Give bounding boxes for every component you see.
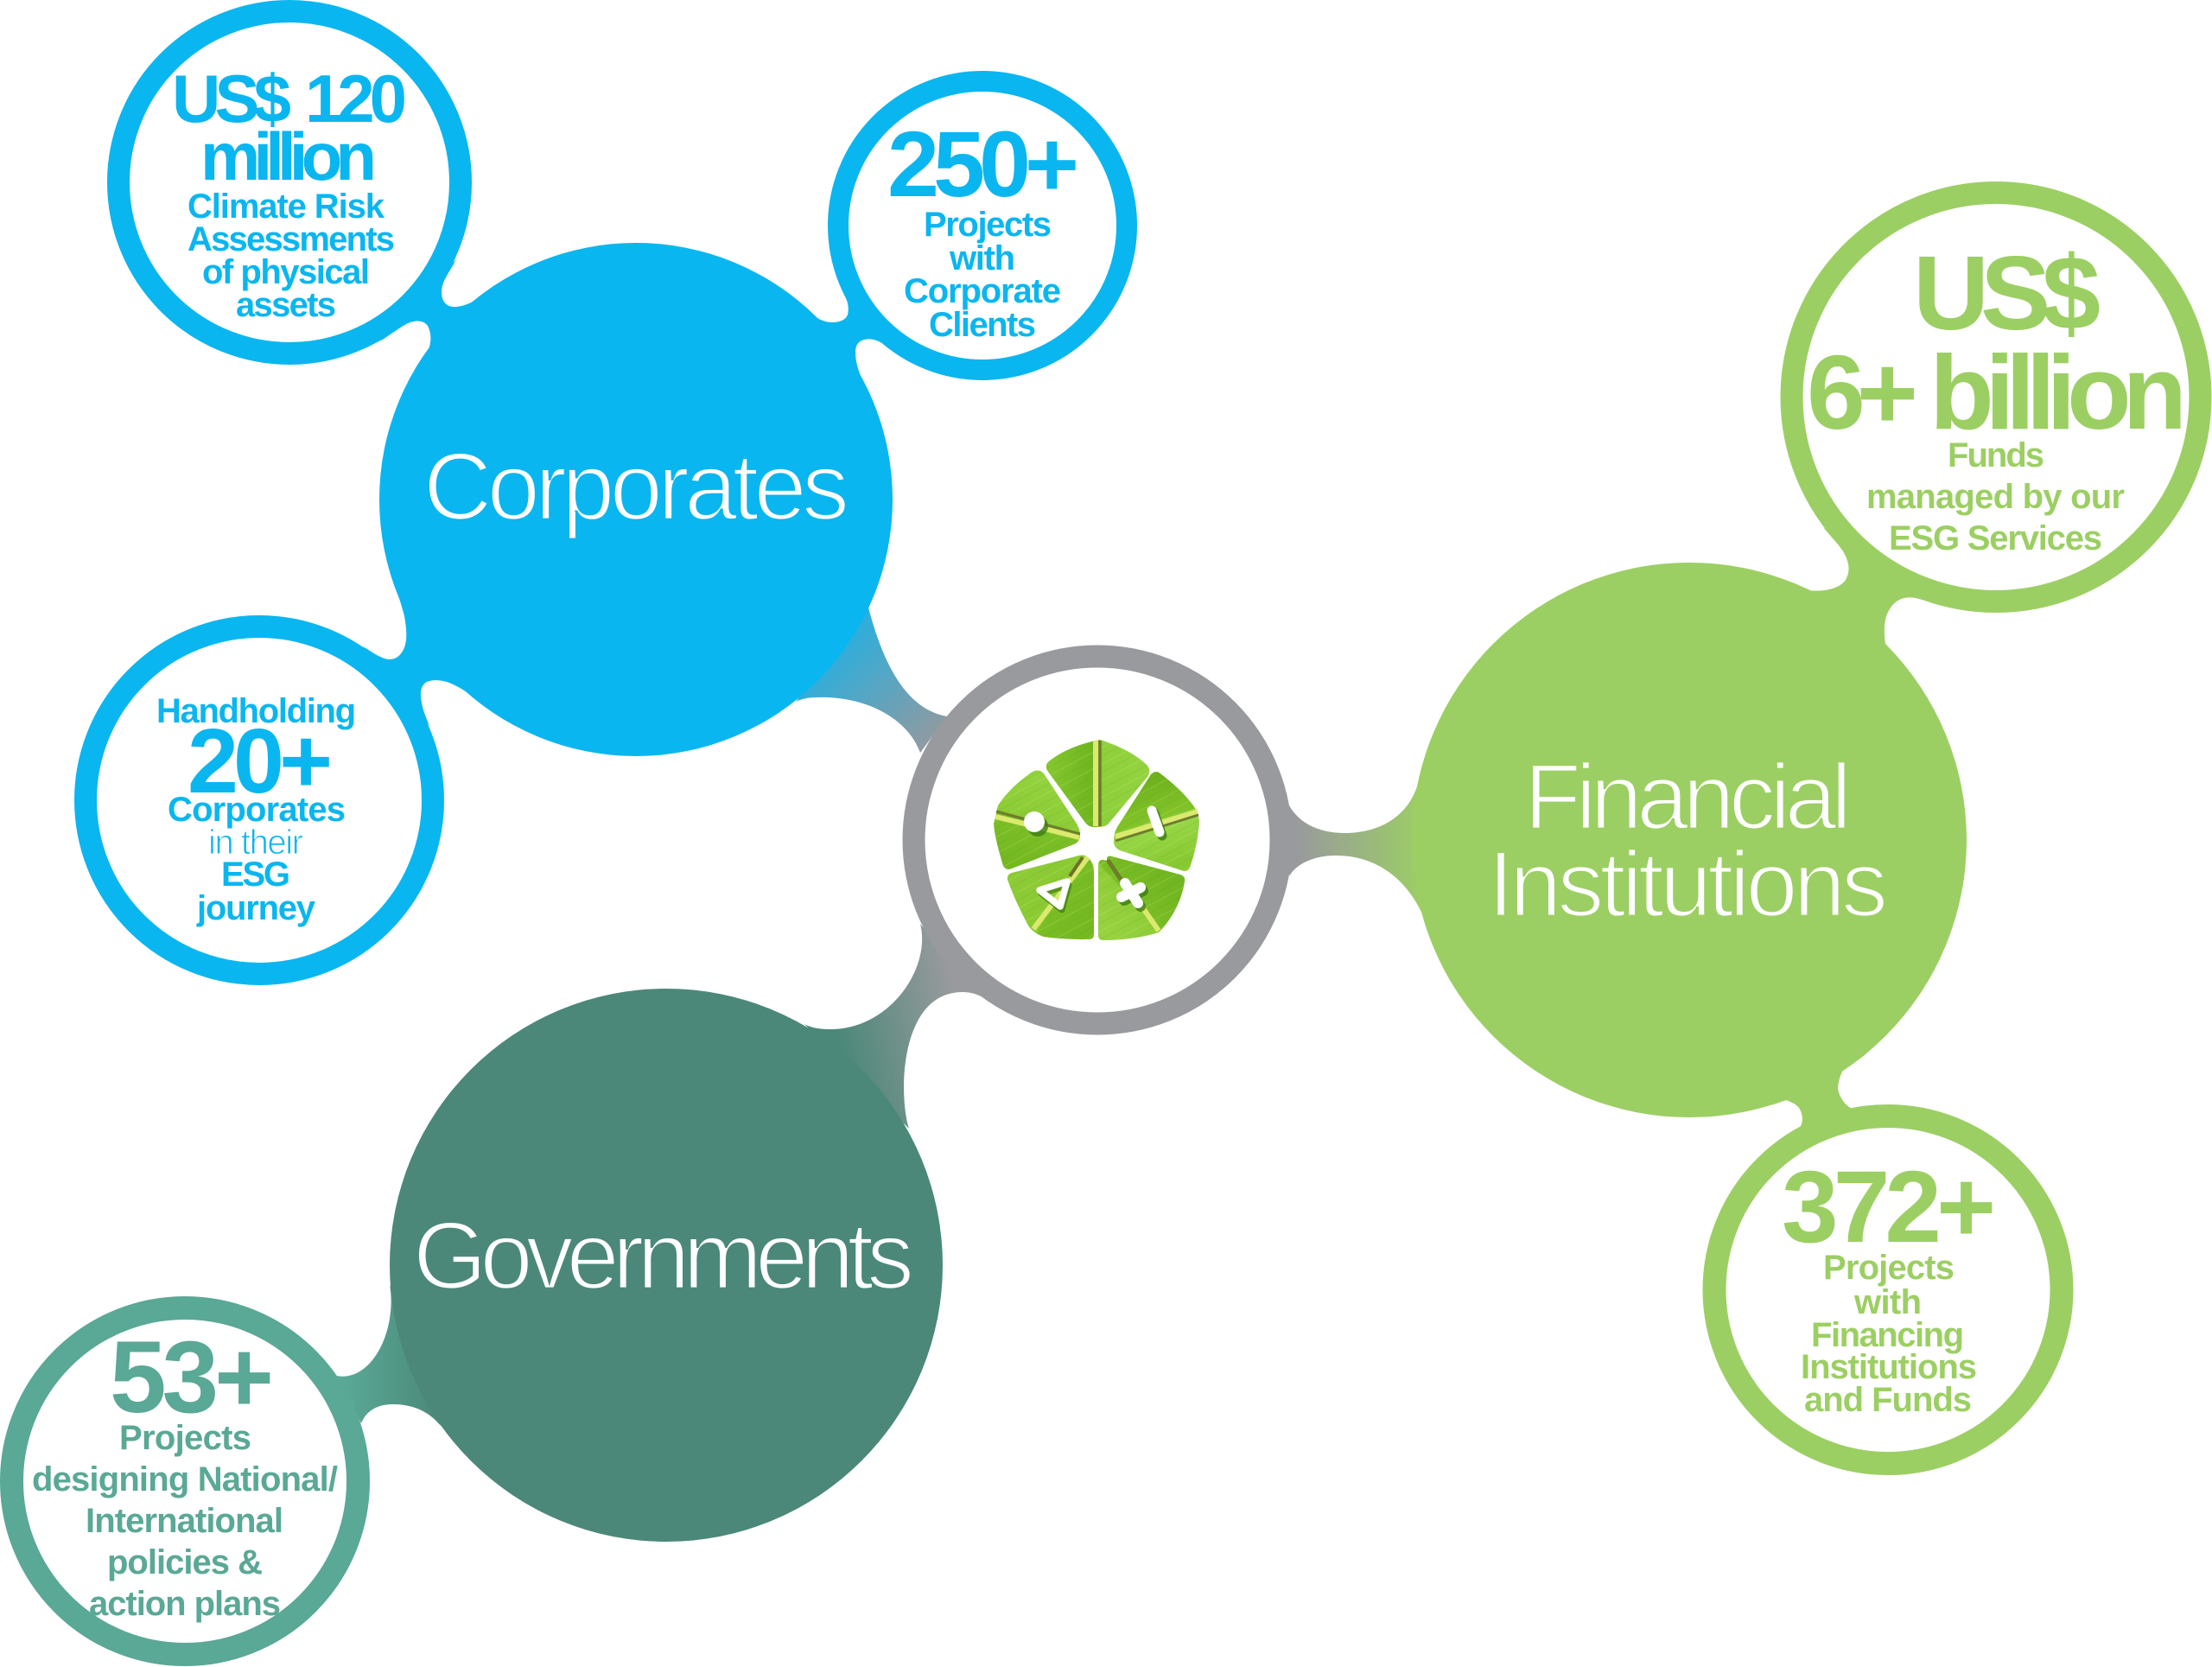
panel: Corporates hub (379, 243, 893, 756)
petal: top (1046, 740, 1149, 827)
panel: Handholding 20+ bubble: in their (208, 824, 303, 862)
icon: leaf logo (994, 740, 1199, 940)
panel: Financial Institutions hub: Financial (1524, 744, 1852, 849)
panel: 372+ bubble: 372+ (1782, 1150, 1996, 1264)
connector: center to Financial Institutions (1289, 784, 1427, 926)
center ring (914, 657, 1281, 1023)
panel: US$ 120 million bubble (118, 11, 461, 353)
panel: Financial Institutions hub (1412, 563, 1967, 1117)
connector: Financial Institutions to US$ 6+ billion bubble (1797, 527, 1936, 657)
panel: 372+ bubble: Financing (1811, 1316, 1964, 1354)
panel: 53+ bubble: designing National/ (32, 1460, 338, 1498)
connector: Corporates to center (796, 608, 947, 753)
panel: US$ 6+ billion bubble (1792, 193, 2200, 601)
petal: lower left with triangle (1007, 856, 1094, 939)
panel: US$ 120 million bubble: Assessments (188, 220, 395, 258)
connector: Financial Institutions to 372+ bubble (1771, 1054, 1875, 1141)
panel: US$ 120 million bubble: 120 (305, 60, 407, 137)
connector: Corporates to 250+ bubble (795, 285, 899, 380)
panel: US$ 120 million bubble: assets (236, 286, 336, 324)
panel: Handholding 20+ bubble: Corporates (168, 791, 346, 829)
panel: 250+ bubble: 250+ (887, 111, 1079, 216)
panel: US$ 6+ billion bubble: managed by our (1866, 478, 2125, 516)
panel: Handholding 20+ bubble: 20+ (188, 710, 333, 812)
panel: 372+ bubble: with (1853, 1283, 1922, 1321)
panel: Handholding 20+ bubble: journey (196, 889, 316, 927)
panel: 250+ bubble: Corporate (904, 272, 1061, 310)
panel: 53+ bubble: action plans (89, 1585, 281, 1623)
connector: Corporates to US$ 120 million bubble (380, 259, 501, 363)
petal: upper right with minus sign (1114, 772, 1199, 871)
panel: US$ 120 million bubble: million (200, 118, 377, 194)
panel: Handholding 20+ bubble: ESG (221, 856, 290, 894)
panel: 372+ bubble: Projects (1823, 1249, 1955, 1287)
panel: 250+ bubble (838, 81, 1127, 370)
panel: 53+ bubble: Projects (119, 1419, 251, 1457)
panel: 372+ bubble (1714, 1117, 2062, 1464)
petal: lower right with plus sign (1098, 856, 1185, 940)
panel: Handholding 20+ bubble (86, 627, 433, 974)
panel: Corporates hub: Corporates (423, 434, 849, 540)
panel: 53+ bubble (12, 1308, 358, 1654)
panel: US$ 120 million bubble: US$ (172, 60, 291, 137)
panel: Governments hub (390, 989, 943, 1542)
connector: Governments to 53+ bubble (336, 1284, 441, 1426)
petal: left with circle (994, 771, 1080, 869)
panel: US$ 6+ billion bubble: Funds (1948, 436, 2044, 474)
panel: Financial Institutions hub: Institutions (1488, 831, 1888, 936)
panel: US$ 6+ billion bubble: ESG Services (1889, 519, 2102, 557)
panel: Handholding 20+ bubble: Handholding (156, 692, 356, 730)
connector: Governments to center (804, 924, 981, 1129)
panel: US$ 6+ billion bubble: 6+ billion (1807, 334, 2187, 451)
panel: US$ 120 million bubble: of physical (202, 253, 370, 291)
panel: 372+ bubble: and Funds (1804, 1381, 1972, 1419)
panel: Governments hub: Governments (413, 1203, 914, 1309)
panel: 250+ bubble: Clients (929, 306, 1036, 344)
panel: 53+ bubble: 53+ (110, 1320, 274, 1435)
panel: US$ 120 million bubble: Climate Risk (188, 188, 385, 226)
panel: 372+ bubble: Institutions (1801, 1348, 1977, 1386)
panel: 53+ bubble: International (86, 1502, 283, 1540)
panel: 250+ bubble: with (949, 239, 1015, 277)
connector: Corporates to Handholding bubble (363, 588, 475, 726)
panel: 53+ bubble: policies & (107, 1543, 263, 1581)
panel: 250+ bubble: Projects (924, 206, 1052, 244)
panel: US$ 6+ billion bubble: US$ (1913, 234, 2101, 352)
